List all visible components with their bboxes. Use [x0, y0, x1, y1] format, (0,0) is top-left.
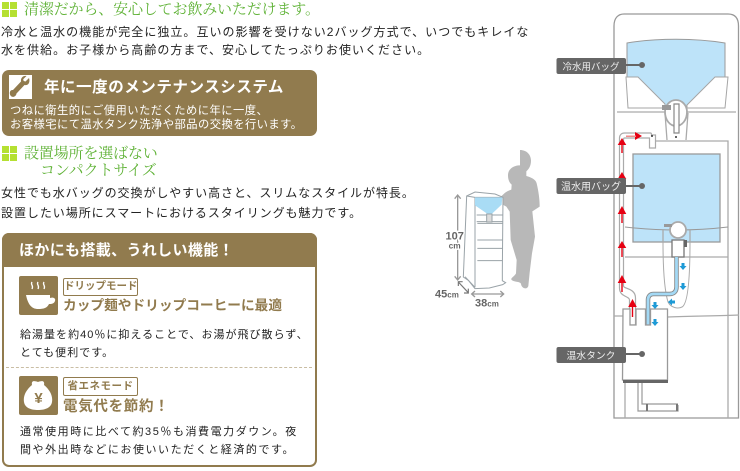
feature text: eco: [20, 426, 298, 456]
maintenance text: つねに衛生的にご使用いただくために年に一度、: [10, 105, 268, 117]
panel: maintenance: [2, 70, 317, 136]
feature heading: drip: カップ麺やドリップコーヒーに最適: [63, 298, 282, 313]
tag: eco mode: [63, 377, 138, 396]
cooler: [463, 192, 506, 289]
arrow: width: [472, 291, 504, 297]
text block: hygiene description: [1, 25, 529, 57]
text block: hygiene description: 冷水と温水の機能が完全に独立。互いの影響を受けない2バッグ方式で、いつでもキレイな: [1, 25, 529, 39]
feature text: eco: 通常使用時に比べて約35％も消費電力ダウン。夜: [20, 426, 298, 438]
cold bag: [617, 39, 736, 140]
tag: drip mode: [63, 278, 138, 296]
text block: compact description: 設置したい場所にスマートにおけるスタイリングも魅力です。: [1, 206, 362, 220]
maintenance text: お客様宅にて温水タンク洗浄や部品の交換を行います。: [10, 119, 303, 131]
arrow: height: [455, 195, 461, 280]
feature text: drip: [20, 328, 309, 359]
text block: compact description: [1, 186, 415, 220]
feature text: eco: 間や外出時などにお使いいただくと経済的です。: [20, 444, 295, 456]
tag: eco mode: 省エネモード: [68, 380, 134, 392]
label: hot water tank: 温水タンク: [567, 350, 615, 362]
blue arrows: [652, 263, 686, 326]
diagram: water system: [556, 13, 740, 419]
label: 38cm: 38cm: [475, 298, 499, 310]
label: hot water tank: [556, 347, 645, 363]
hot water riser pipe: [620, 133, 656, 325]
icon: coin purse: ¥: [34, 390, 43, 407]
label: cm: cm: [449, 240, 461, 250]
red arrows: [618, 132, 642, 317]
maintenance text: [10, 104, 303, 131]
text block: hygiene description: 水を供給。お子様から高齢の方まで、安心してたっぷりお使いください。: [1, 43, 430, 57]
cabinet outline: [614, 14, 738, 418]
label: cold water bag: 冷水用バッグ: [562, 61, 620, 73]
panel: other features: [2, 233, 317, 467]
feature text: drip: 給湯量を約40％に抑えることで、お湯が飛び散らず、: [20, 329, 309, 341]
panel header: [2, 233, 317, 267]
heading text: line 2: コンパクトサイズ: [40, 163, 157, 179]
icon: green squares: [2, 146, 17, 161]
text block: compact description: 女性でも水バッグの交換がしやすい高さと、スリムなスタイルが特長。: [1, 186, 415, 200]
hot tank: [614, 309, 739, 411]
label: hot water bag: [556, 178, 645, 194]
label: cold water bag: [556, 58, 645, 74]
label: hot water bag: 温水用バッグ: [561, 180, 621, 193]
curved drain: [663, 242, 690, 308]
label: 45cm: 45cm: [435, 289, 459, 301]
illustration: person and cooler with dimensions: [435, 150, 540, 310]
person silhouette: [488, 150, 540, 288]
icon: green squares: [2, 2, 17, 17]
heading: compact size: [2, 145, 158, 179]
label: 107: 107: [445, 230, 464, 242]
arrow: depth: [458, 282, 468, 293]
tag: drip mode: ドリップモード: [64, 280, 138, 292]
feature text: drip: とても便利です。: [20, 347, 114, 359]
cold water feed pipe: [648, 257, 676, 325]
panel title: ほかにも搭載、うれしい機能！: [19, 242, 234, 259]
icon: coin purse: [19, 376, 58, 415]
icon: steaming cup: [19, 276, 58, 315]
hot bag housing: [625, 141, 728, 418]
heading: hygiene: [2, 1, 320, 18]
feature heading: eco: 電気代を節約！: [63, 399, 169, 415]
dashed divider: [6, 367, 312, 368]
icon: wrench: [9, 75, 32, 99]
heading text: line 1: 設置場所を選ばない: [24, 146, 158, 162]
heading text: 清潔だから、安心してお飲みいただけます。: [24, 2, 320, 18]
maintenance title: 年に一度のメンテナンスシステム: [44, 79, 284, 96]
